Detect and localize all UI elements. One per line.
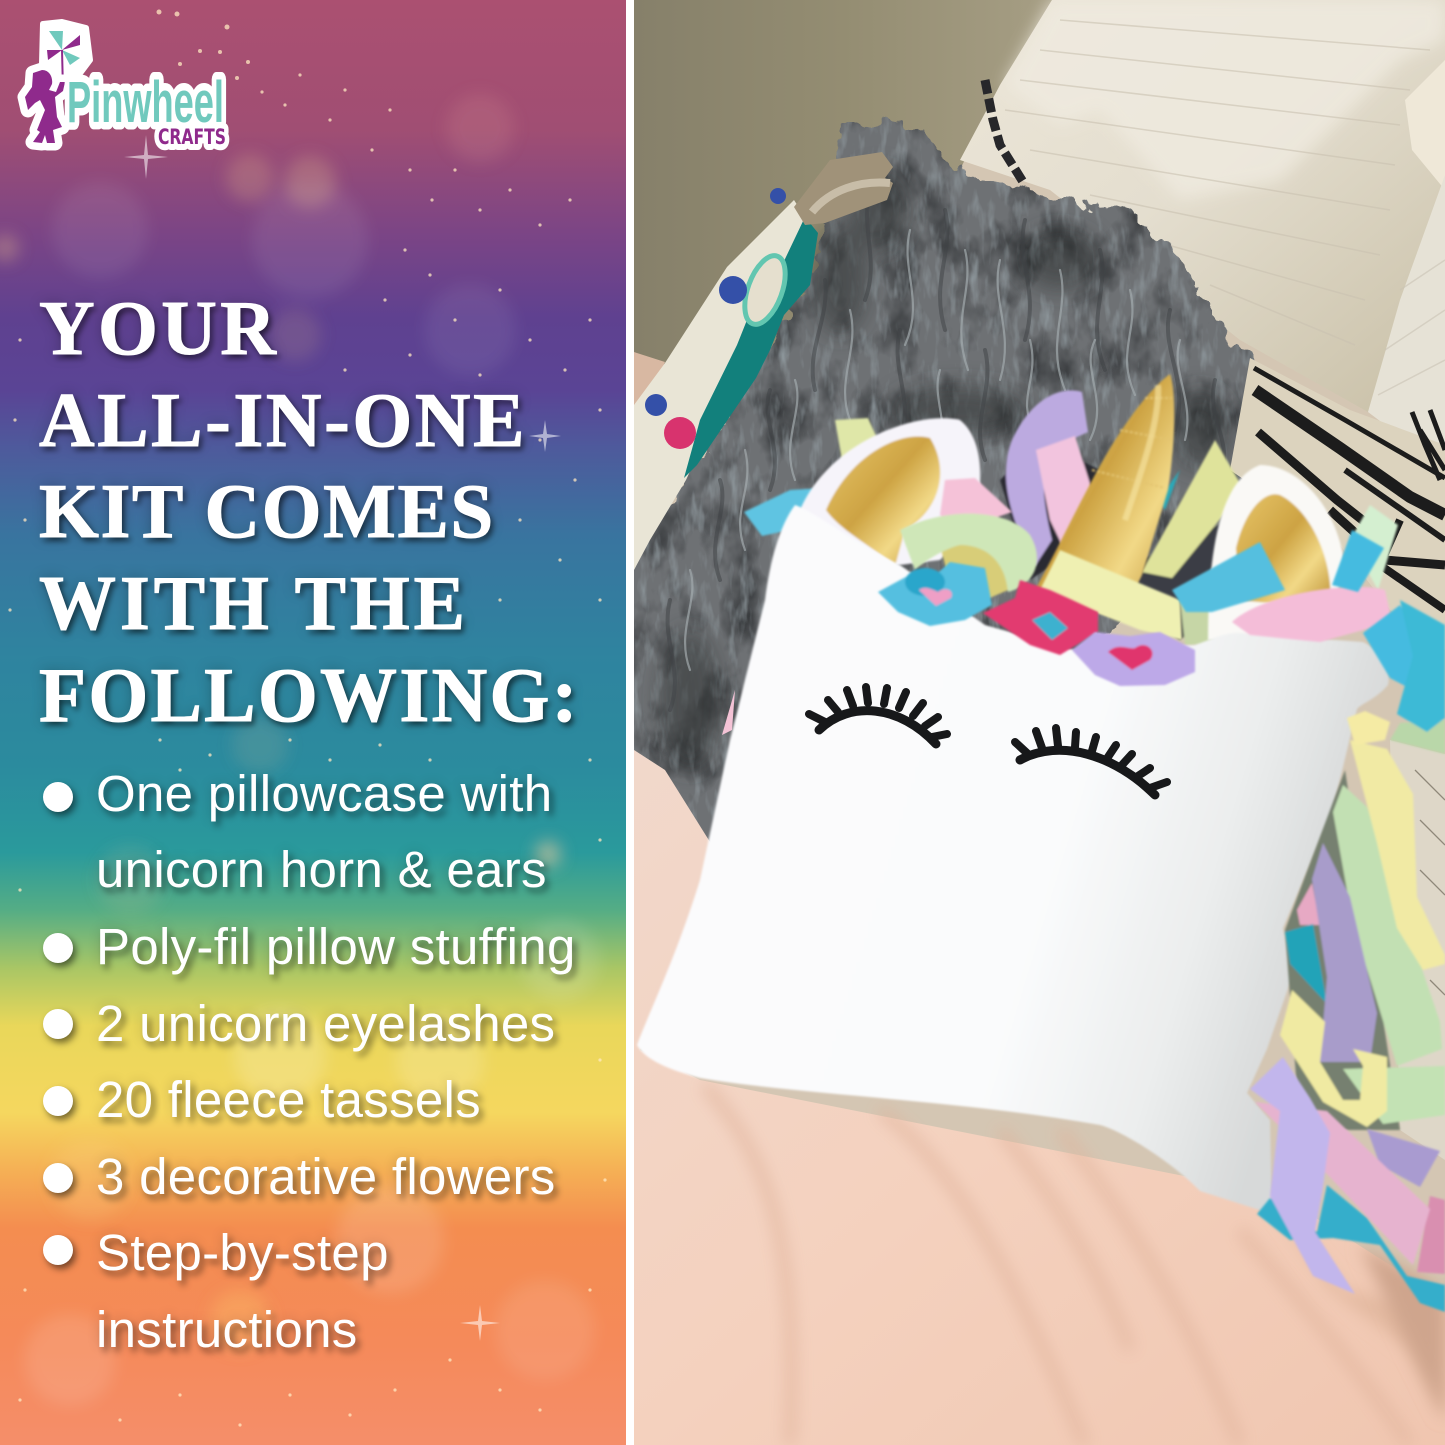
right eyelash <box>1015 728 1167 795</box>
bullet list: Step-by-step <box>96 1224 389 1281</box>
pink ribbon left edge <box>722 690 735 735</box>
heading: KIT COMES <box>39 468 495 554</box>
gold unicorn horn <box>1035 374 1174 620</box>
icon: pinwheel <box>47 31 80 90</box>
blue ribbon <box>1172 542 1285 612</box>
unicorn pillow body <box>637 505 1389 1214</box>
heading: YOUR <box>39 285 279 371</box>
pink bed sheet <box>634 750 1445 1445</box>
gray shaggy fur pillow <box>610 120 1258 850</box>
white divider line <box>626 0 634 1445</box>
bullet list: 2 unicorn eyelashes <box>96 995 555 1052</box>
bullet list: One pillowcase with <box>96 765 552 822</box>
bullet list: 3 decorative flowers <box>96 1148 556 1205</box>
back ribbons and dark gap <box>744 390 1398 645</box>
icon: girl silhouette <box>25 70 65 143</box>
llama pillow <box>634 152 893 570</box>
yellow ribbon <box>1040 550 1182 640</box>
beige striped sheet right of mane <box>1390 740 1445 1160</box>
bullet list: instructions <box>96 1301 358 1358</box>
logo white pinwheel backing <box>42 22 90 82</box>
black tassel detail <box>985 80 1025 185</box>
heading: FOLLOWING: <box>39 652 580 738</box>
left eyelash <box>809 687 947 744</box>
logo: Pinwheel Crafts <box>25 22 226 149</box>
black and cream striped pillow <box>1230 358 1445 650</box>
lower mane ribbons <box>1250 1057 1445 1312</box>
hanging mane ribbons right <box>1280 711 1445 1130</box>
sofa back tint <box>634 352 665 405</box>
bullet list: 20 fleece tassels <box>96 1071 481 1128</box>
wall <box>634 0 1052 365</box>
panel: rainbow background <box>0 0 626 1445</box>
flower: lavender <box>1072 632 1195 686</box>
bullet list: Poly-fil pillow stuffing <box>96 918 576 975</box>
right ear <box>1208 465 1345 640</box>
glitter dots <box>8 10 607 1427</box>
flower: pink <box>983 580 1098 655</box>
pale green ribbon loop <box>900 478 1037 600</box>
striped bed pillow <box>960 0 1445 470</box>
bullet list: unicorn horn & ears <box>96 841 547 898</box>
heading <box>39 285 580 738</box>
left ear <box>800 418 980 570</box>
logo subtitle: CRAFTS <box>158 125 226 149</box>
bullet list <box>42 765 580 1358</box>
fur dark shadow patches <box>660 170 1230 770</box>
logo wordmark: Pinwheel <box>67 70 224 135</box>
blue ribbons at corner <box>1332 530 1445 754</box>
panel: photo of unicorn pillow <box>610 0 1445 1445</box>
flower: blue <box>878 562 992 626</box>
heading: WITH THE <box>39 560 469 646</box>
heading: ALL-IN-ONE <box>39 377 527 463</box>
pink ribbon top right <box>1232 587 1392 642</box>
sparkle stars <box>124 135 561 1341</box>
bokeh glow <box>0 94 600 1406</box>
